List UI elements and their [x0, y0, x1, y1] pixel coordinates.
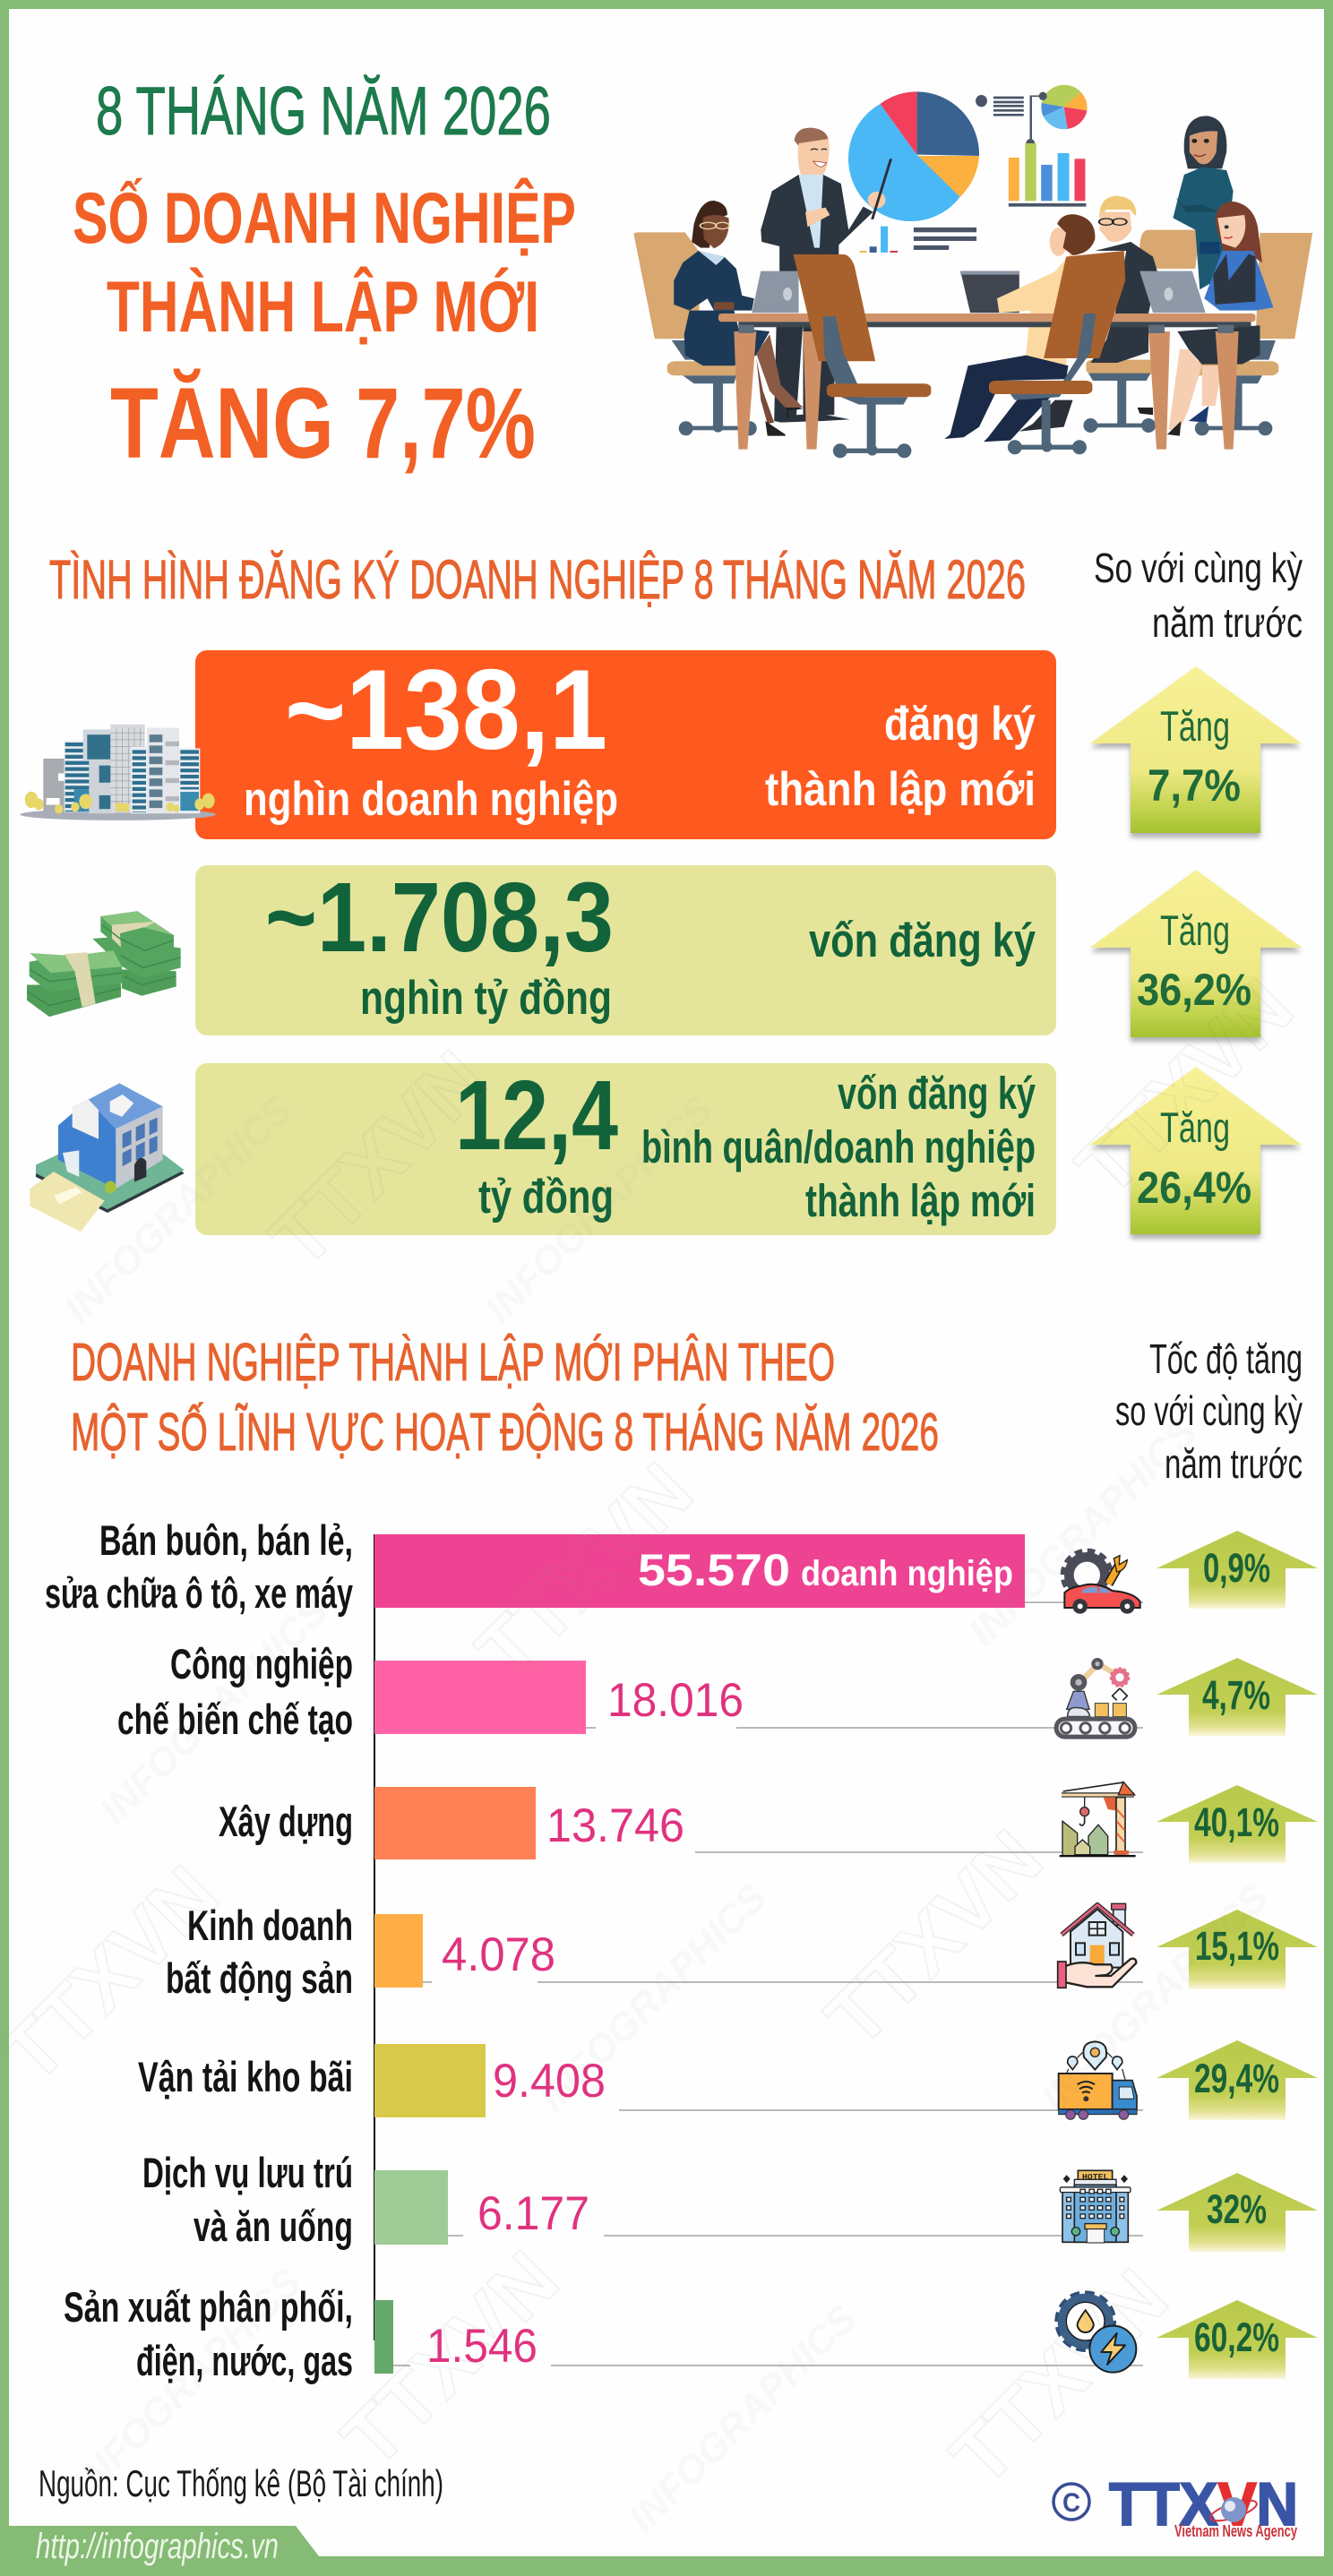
arrow: up 26,4%: Tăng	[1160, 1103, 1230, 1151]
bar: construction	[374, 1787, 684, 1859]
arrow: 29,4%	[1157, 2040, 1318, 2120]
description: vốn đăng ký	[809, 914, 1036, 967]
man with glasses	[1090, 196, 1157, 363]
chairs behind the table	[633, 230, 1312, 435]
arrow: 60,2%: 60,2%	[1194, 2314, 1279, 2360]
arrow: 32%	[1157, 2173, 1318, 2252]
category labels: Xây dựng	[219, 1798, 353, 1845]
category labels	[45, 1516, 353, 2384]
figure: 138,1: ~138,1	[285, 646, 607, 773]
copyright mark: C	[1062, 2488, 1080, 2518]
bar: real estate: 4.078	[442, 1928, 555, 1981]
bar chart on board	[860, 143, 1086, 253]
column note: growth rate	[1115, 1335, 1303, 1487]
icon: car and gear	[1062, 1550, 1140, 1614]
arrow: 4,7%	[1157, 1658, 1318, 1736]
bar: manufacturing	[374, 1661, 744, 1734]
description: vốn đăng ký	[838, 1068, 1036, 1119]
category labels: Kinh doanh	[187, 1902, 353, 1949]
icon: stacks of money	[27, 911, 181, 1017]
title: line 1: SỐ DOANH NGHIỆP	[73, 177, 576, 259]
arrow: up 7,7%	[1090, 666, 1302, 833]
arrow: up 26,4%: 26,4%	[1137, 1163, 1251, 1213]
watermark outlines: TTXVN	[809, 1814, 1060, 2064]
arrow: up 36,2%: 36,2%	[1137, 965, 1251, 1015]
bar: transport and warehousing	[374, 2044, 606, 2117]
category labels: Công nghiệp	[170, 1640, 353, 1687]
panel: new businesses	[195, 646, 1056, 839]
description: thành lập mới	[805, 1175, 1036, 1226]
icon: office building with money	[30, 1083, 185, 1232]
woman on the left	[674, 201, 804, 436]
unit: nghìn tỷ đồng	[360, 972, 612, 1025]
arrow: up 26,4%	[1090, 1067, 1302, 1234]
title block	[73, 73, 576, 479]
arrow: 40,1%: 40,1%	[1194, 1799, 1279, 1845]
bar: power, water, gas	[374, 2300, 538, 2374]
icon: delivery truck	[1059, 2041, 1137, 2119]
watermark outlines: TTXVN	[325, 2235, 576, 2485]
arrow: 15,1%: 15,1%	[1195, 1923, 1279, 1969]
arrow: up 36,2%: Tăng	[1160, 906, 1230, 954]
bar: manufacturing: 18.016	[607, 1674, 744, 1727]
bar: wholesale and retail: 55.570	[638, 1545, 790, 1595]
title: line 2: THÀNH LẬP MỚI	[107, 266, 539, 348]
watermark: INFOGRAPHICS	[1032, 1876, 1277, 2120]
category labels: điện, nước, gas	[136, 2337, 353, 2384]
unit: tỷ đồng	[478, 1171, 614, 1224]
bar chart axis and leader lines	[374, 1534, 1143, 2366]
arrow: up 7,7%: 7,7%	[1148, 760, 1241, 811]
bar: construction: 13.746	[546, 1799, 684, 1852]
figure: 12,4: 12,4	[455, 1060, 618, 1171]
arrow: 60,2%	[1157, 2300, 1318, 2379]
figure: 1.708,3: ~1.708,3	[265, 863, 614, 973]
man seen from behind	[944, 214, 1095, 442]
category labels: Vận tải kho bãi	[138, 2053, 353, 2100]
section heading: sectors: DOANH NGHIỆP THÀNH LẬP MỚI PHÂN THEO	[71, 1333, 835, 1392]
panel: registered capital	[195, 863, 1056, 1035]
logo: TTXVN	[1054, 2470, 1298, 2540]
icon: gear with drop and bolt	[1057, 2293, 1136, 2373]
bar: accommodation and food	[374, 2170, 589, 2245]
category labels: và ăn uống	[194, 2202, 353, 2250]
arrow: 0,9%	[1157, 1531, 1318, 1609]
front chairs	[794, 251, 1125, 458]
category labels: Dịch vụ lưu trú	[142, 2149, 353, 2196]
watermark: INFOGRAPHICS	[620, 2297, 865, 2541]
watermark: INFOGRAPHICS	[530, 1876, 776, 2120]
title: headline figure: TĂNG 7,7%	[110, 367, 536, 479]
arrow: 29,4%: 29,4%	[1194, 2056, 1279, 2101]
watermark outlines: TTXVN	[254, 1035, 504, 1284]
big pie chart	[848, 91, 979, 221]
wordmark: TTXVN	[1109, 2470, 1298, 2538]
icon: city buildings	[20, 725, 216, 820]
arrow: 0,9%: 0,9%	[1203, 1545, 1270, 1591]
footer band with url: http://infographics.vn	[36, 2527, 279, 2566]
small pie chart	[976, 85, 1088, 148]
table	[718, 313, 1255, 450]
watermark outlines: TTXVN	[460, 1447, 710, 1696]
watermark: INFOGRAPHICS	[56, 1087, 301, 1332]
copyright mark	[1054, 2484, 1089, 2520]
bar: wholesale and retail	[374, 1534, 1025, 1608]
panel: average capital	[195, 1060, 1056, 1235]
woman on the right	[1138, 202, 1273, 436]
description: thành lập mới	[765, 763, 1036, 816]
arrow: 15,1%	[1157, 1910, 1318, 1989]
category labels: sửa chữa ô tô, xe máy	[45, 1569, 353, 1617]
category labels: chế biến chế tạo	[117, 1696, 353, 1743]
unit: nghìn doanh nghiệp	[244, 773, 618, 826]
icon: hotel: HOTEL	[1082, 2172, 1109, 2182]
watermark: INFOGRAPHICS	[477, 1087, 722, 1332]
bar: real estate	[374, 1914, 555, 1988]
bar: transport and warehousing: 9.408	[493, 2055, 606, 2108]
watermark outlines: TTXVN	[934, 2253, 1185, 2503]
description	[641, 1068, 1036, 1226]
globe	[1208, 2496, 1259, 2525]
category labels: Sản xuất phân phối,	[64, 2283, 353, 2331]
watermark: INFOGRAPHICS	[960, 1410, 1206, 1654]
description	[765, 698, 1036, 816]
icon: robot arm conveyor	[1054, 1658, 1137, 1739]
bar: accommodation and food: 6.177	[477, 2187, 589, 2240]
watermark: INFOGRAPHICS	[64, 2261, 310, 2505]
bar: power, water, gas: 1.546	[426, 2320, 538, 2373]
watermark outlines: TTXVN	[1060, 963, 1311, 1213]
arrow: up 36,2%	[1090, 870, 1302, 1037]
category labels: bất động sản	[166, 1954, 353, 2002]
category labels: Bán buôn, bán lẻ,	[99, 1516, 353, 1564]
bar: wholesale and retail: doanh nghiệp	[801, 1554, 1013, 1593]
icon: crane and buildings	[1060, 1782, 1136, 1857]
illustration: business meeting	[633, 85, 1312, 458]
arrow: 32%: 32%	[1207, 2186, 1267, 2232]
icon: hotel	[1060, 2170, 1131, 2243]
description: bình quân/doanh nghiệp	[641, 1121, 1036, 1172]
arrow: up 7,7%: Tăng	[1160, 702, 1230, 750]
column note: compared with previous year	[1094, 545, 1303, 646]
section heading: sectors	[71, 1333, 939, 1462]
title: period: 8 THÁNG NĂM 2026	[96, 73, 551, 150]
description: đăng ký	[884, 698, 1036, 751]
presenter	[761, 128, 891, 423]
watermark	[56, 1087, 1277, 2541]
icon: house in hand	[1058, 1903, 1136, 1988]
laptops	[752, 271, 1206, 313]
standing woman	[1173, 116, 1234, 289]
source note: Nguồn: Cục Thống kê (Bộ Tài chính)	[39, 2462, 443, 2504]
arrow: 40,1%	[1157, 1785, 1318, 1863]
watermark: INFOGRAPHICS	[91, 1589, 337, 1833]
arrow: 4,7%: 4,7%	[1202, 1672, 1270, 1718]
watermark outlines	[0, 963, 1311, 2503]
